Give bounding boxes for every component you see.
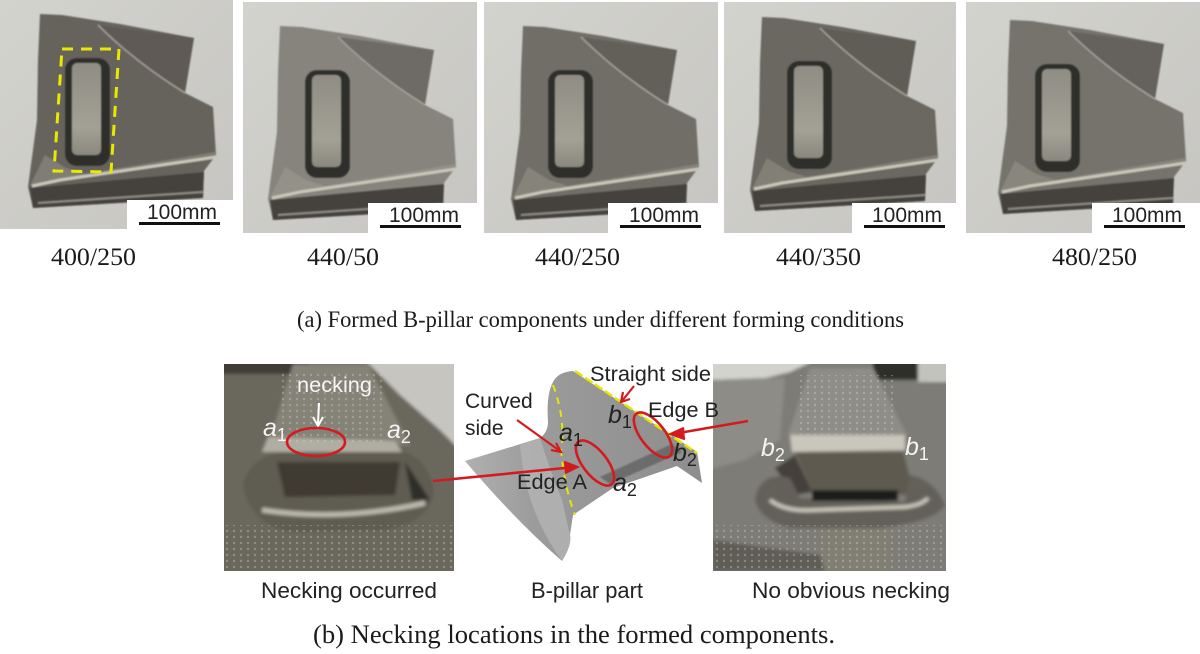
condition labels: 440/350 <box>776 244 861 271</box>
caption (b): (b) Necking locations in the formed components. <box>313 620 835 649</box>
photo: part 400/250 <box>28 14 216 208</box>
label: b1: b <box>905 433 919 461</box>
scale bar 100mm <box>852 203 964 233</box>
photo: part 440/250 <box>511 26 699 220</box>
photo: necking occurred <box>220 360 460 575</box>
label: necking: necking <box>297 374 372 397</box>
diagram: B-pillar part <box>465 363 719 561</box>
arrow: straight side <box>621 386 634 402</box>
condition labels: 440/50 <box>307 244 379 271</box>
straight side dashed line <box>575 371 697 453</box>
callout: edge A ellipse <box>569 434 621 492</box>
condition labels: 400/250 <box>51 244 136 271</box>
caption: necking occurred: Necking occurred <box>261 578 437 603</box>
label: a2: 2 <box>401 427 411 447</box>
photo: no obvious necking <box>708 360 951 575</box>
scale bar 100mm <box>1092 203 1200 233</box>
arrow: no necking photo to edge B <box>671 421 748 439</box>
panel: 440/250 component <box>484 2 720 233</box>
condition labels: 480/250 <box>1052 244 1137 271</box>
panel: 480/250 component <box>966 2 1200 233</box>
label: b1: b <box>608 401 622 429</box>
label: Curved side: Curved <box>465 390 533 413</box>
scale bar 100mm: 100mm <box>389 204 459 227</box>
callout: edge B ellipse <box>627 406 679 464</box>
panel: 440/350 component <box>724 2 964 233</box>
arrow: necking photo to edge A <box>433 462 577 481</box>
photo: part 440/350 <box>750 17 938 211</box>
caption: no obvious necking: No obvious necking <box>752 578 950 603</box>
photo: part 440/50 <box>268 26 456 220</box>
label: b2: b <box>673 439 687 467</box>
scale bar 100mm: 100mm <box>147 201 217 224</box>
label: b1: 1 <box>919 444 929 464</box>
label: Edge A: Edge A <box>517 471 587 494</box>
caption: B-pillar part: B-pillar part <box>531 578 643 603</box>
label: Curved side: side <box>465 417 504 440</box>
label: b2: 2 <box>775 445 785 465</box>
part shape <box>465 371 702 561</box>
label: b2: 2 <box>687 450 697 470</box>
label: Straight side: Straight side <box>590 363 711 386</box>
arrow: necking pointer <box>313 403 323 426</box>
label: a2: a <box>613 469 627 497</box>
panel: 400/250 component <box>0 0 239 230</box>
label: b2: b <box>761 434 775 462</box>
scale bar 100mm: 100mm <box>629 204 699 227</box>
caption (a): (a) Formed B-pillar components under different forming conditions <box>297 307 904 332</box>
label: a2: a <box>387 416 401 444</box>
condition labels <box>51 244 1137 271</box>
scale bar 100mm: 100mm <box>872 204 942 227</box>
label: a2: 2 <box>627 480 637 500</box>
label: a1: 1 <box>277 425 287 445</box>
arrow: curved side <box>517 420 561 452</box>
label: a1: 1 <box>573 430 583 450</box>
label: a1: a <box>559 419 573 447</box>
label: b1: 1 <box>622 412 632 432</box>
scale bar 100mm <box>127 200 239 230</box>
scale bar 100mm <box>608 203 720 233</box>
label: a1: a <box>263 414 277 442</box>
label: Edge B: Edge B <box>648 399 719 422</box>
panel: 440/50 component <box>243 2 480 233</box>
curved side dashed line <box>553 385 575 515</box>
scale bar 100mm <box>368 203 480 233</box>
highlight: yellow dashed box <box>54 49 119 172</box>
callout: necking ellipse <box>287 428 345 456</box>
photo: part 480/250 <box>998 20 1186 214</box>
scale bar 100mm: 100mm <box>1112 204 1182 227</box>
condition labels: 440/250 <box>535 244 620 271</box>
